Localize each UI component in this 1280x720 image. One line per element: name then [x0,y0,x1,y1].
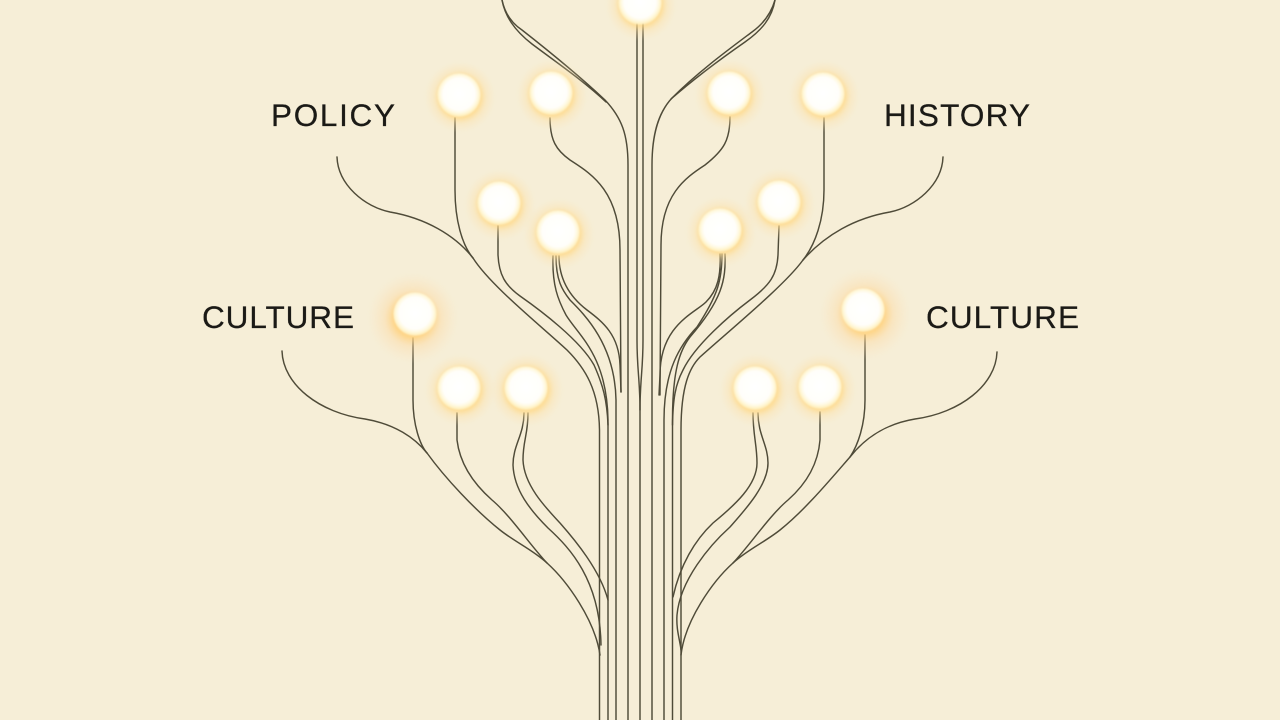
node: left culture 3 [490,353,564,427]
wires: right history branch [659,117,943,720]
node: right culture 3 [785,353,857,425]
label: policy: POLICY [271,97,395,133]
node: policy 2 [516,59,588,131]
label: culture right: CULTURE [926,299,1079,335]
node: history 3 [685,196,757,268]
node: policy 3 [464,169,536,241]
node: policy 1 [424,61,496,133]
wires: left policy branch [337,118,621,720]
wires: right culture branch [673,335,997,655]
node: left culture 1 [367,272,459,364]
node: right culture 2 [719,353,793,427]
label: history: HISTORY [884,97,1030,133]
glowing nodes [367,0,911,427]
node: history 4 [744,168,816,240]
node: right culture 1 [819,268,911,360]
node: left culture 2 [424,354,496,426]
node: history 1 [694,59,766,131]
tree of wires [282,0,997,720]
wires: left culture branch [282,338,608,655]
node: history 2 [788,60,860,132]
label: culture left: CULTURE [202,299,354,335]
node: top centre [605,0,677,41]
node: policy 4 [523,198,595,270]
wires: top central pair and trunk [502,0,775,720]
